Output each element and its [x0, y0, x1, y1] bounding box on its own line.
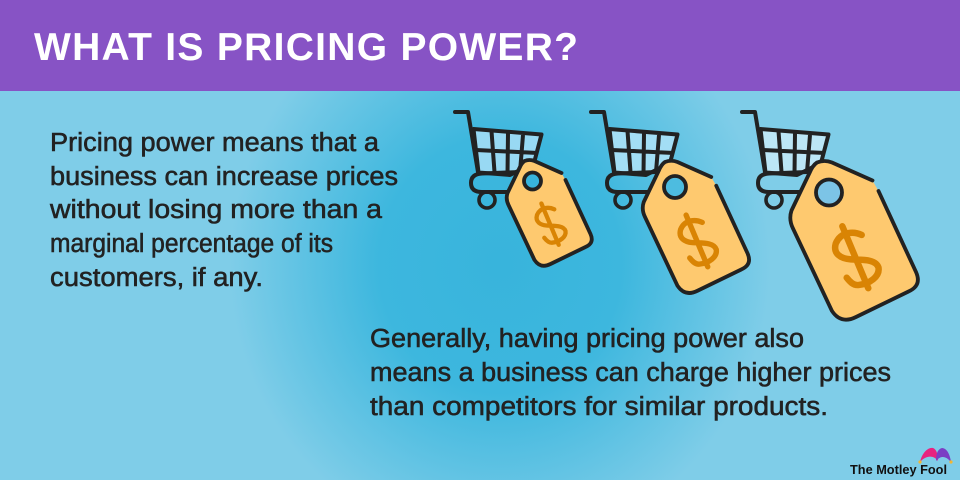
text block: definition: business can increase prices	[50, 163, 398, 191]
logo text: The Motley Fool	[850, 462, 947, 477]
icon: shopping cart with medium price tag	[591, 112, 749, 293]
text block: definition: marginal percentage of its	[50, 230, 333, 258]
title: WHAT IS PRICING POWER?	[34, 26, 578, 69]
text block: higher prices: means a business can charge higher prices	[370, 359, 891, 387]
text block: higher prices	[370, 325, 891, 421]
text block: definition	[49, 129, 398, 292]
icon: jester hat	[918, 448, 953, 464]
text block: higher prices: than competitors for similar products.	[370, 393, 828, 421]
text block: definition: without losing more than a	[49, 196, 383, 224]
icon: shopping cart with small price tag	[455, 112, 592, 266]
text block: definition: customers, if any.	[50, 264, 263, 292]
header band	[0, 0, 960, 91]
text block: higher prices: Generally, having pricing power also	[370, 325, 804, 353]
icon: shopping cart with large price tag	[742, 112, 918, 320]
logo: The Motley Fool	[850, 448, 953, 477]
text block: definition: Pricing power means that a	[50, 129, 380, 157]
